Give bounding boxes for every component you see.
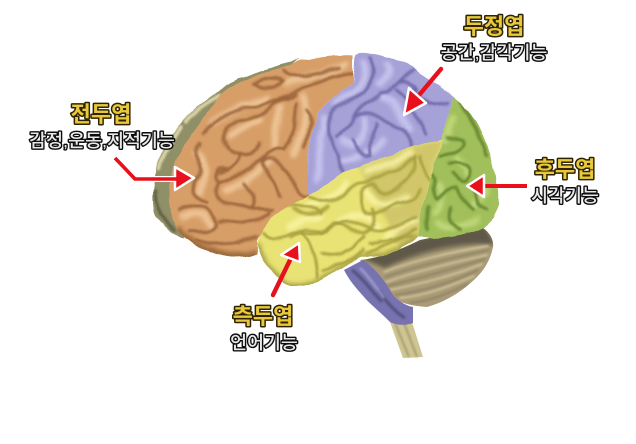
- arrow: occipital lobe: [467, 175, 527, 197]
- occipital lobe (green): [415, 95, 500, 240]
- frontal lobe (orange): [168, 55, 354, 258]
- arrow: parietal lobe: [404, 69, 441, 115]
- title: occipital lobe: 후두엽: [535, 157, 595, 182]
- arrow: temporal lobe: [273, 243, 300, 295]
- cerebellum: [360, 228, 494, 307]
- title: frontal lobe: 전두엽: [71, 102, 131, 127]
- label: parietal lobe function: 공간,감각기능: [441, 42, 547, 63]
- label: occipital lobe function: 시각기능: [531, 185, 599, 206]
- brainstem: [344, 260, 413, 325]
- title: temporal lobe: 측두엽: [233, 304, 293, 329]
- title: parietal lobe: 두정엽: [464, 14, 524, 39]
- parietal lobe (purple): [307, 52, 453, 196]
- spinal cord: [390, 322, 423, 358]
- temporal lobe (yellow): [257, 140, 442, 286]
- skull rim behind the frontal lobe: [152, 60, 300, 238]
- label: temporal lobe function: 언어기능: [230, 332, 298, 353]
- label: frontal lobe function: 감정,운동,지적기능: [29, 130, 175, 151]
- arrow: frontal lobe: [115, 158, 194, 190]
